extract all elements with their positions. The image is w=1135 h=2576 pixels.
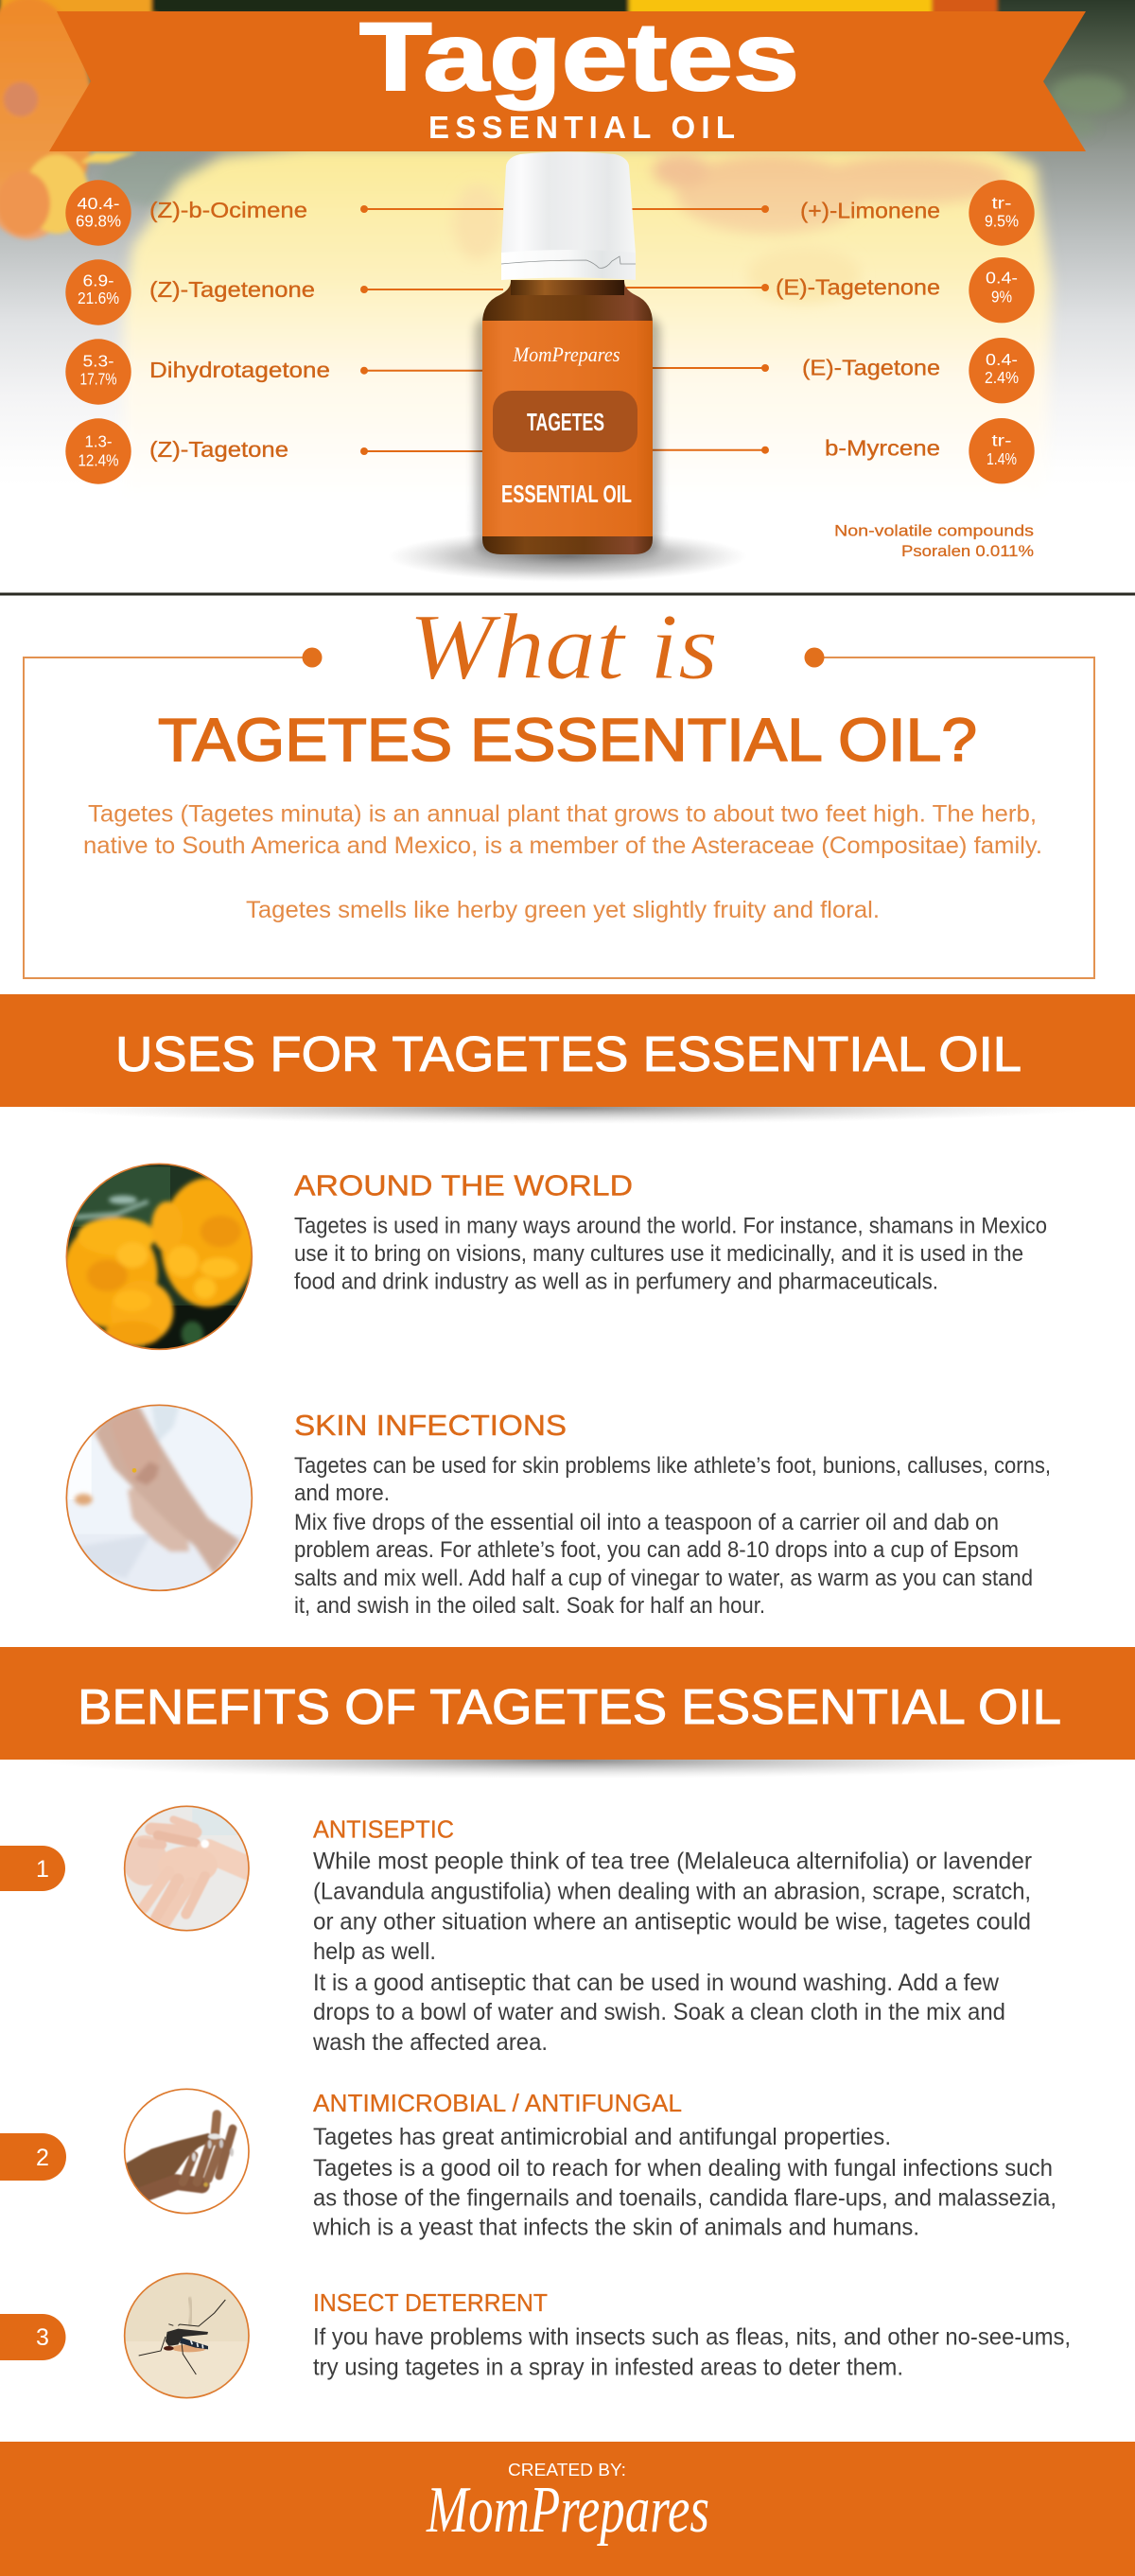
compound: Z-Tagetone: 1.3- bbox=[85, 432, 113, 451]
number badge 1 bbox=[0, 1846, 65, 1891]
section band: uses: USES FOR TAGETES ESSENTIAL OIL bbox=[115, 1027, 1022, 1082]
compound: E-Tagetone: 2.4% bbox=[985, 368, 1019, 387]
title ribbon banner bbox=[49, 3, 1086, 151]
description paragraph: Tagetes smells like herby green yet slightly fruity and floral. bbox=[246, 897, 880, 923]
compound: Z-Tagetone: (Z)-Tagetone bbox=[149, 437, 288, 462]
body text bbox=[312, 2124, 1056, 2240]
body text: While most people think of tea tree (Melaleuca alternifolia) or lavender bbox=[313, 1849, 1032, 1875]
compound: Limonene: 9.5% bbox=[985, 212, 1019, 231]
body text: (Lavandula angustifolia) when dealing with an abrasion, scrape, scratch, bbox=[313, 1879, 1031, 1905]
use: around the world bbox=[57, 1154, 1047, 1359]
description paragraph bbox=[83, 801, 1042, 923]
compound: E-Tagetenone: (E)-Tagetenone bbox=[776, 275, 940, 300]
footer bbox=[0, 2442, 1135, 2576]
compound: Dihydrotagetone: Dihydrotagetone bbox=[149, 358, 330, 382]
body text: Tagetes has great antimicrobial and antifungal properties. bbox=[313, 2124, 891, 2150]
compound: E-Tagetone: (E)-Tagetone bbox=[802, 356, 940, 380]
body text: use it to bring on visions, many cultures use it medicinally, and it is used in the bbox=[294, 1241, 1023, 1267]
body text bbox=[294, 1214, 1047, 1294]
body text: help as well. bbox=[313, 1938, 436, 1965]
body text: try using tagetes in a spray in infested areas to deter them. bbox=[313, 2354, 903, 2380]
body text bbox=[294, 1453, 1051, 1619]
subtitle: Essential Oil: ESSENTIAL OIL bbox=[428, 110, 735, 145]
bottle cap bbox=[501, 151, 636, 280]
heading: antimicrobial: ANTIMICROBIAL / ANTIFUNGAL bbox=[313, 2089, 682, 2117]
compound: Z-Tagetenone: 21.6% bbox=[78, 289, 119, 307]
body text: It is a good antiseptic that can be used in wound washing. Add a few bbox=[313, 1970, 1000, 1996]
number badge 3: 3 bbox=[36, 2324, 49, 2351]
compound: Z-Tagetenone: (Z)-Tagetenone bbox=[149, 277, 315, 302]
body text: Tagetes is a good oil to reach for when dealing with fungal infections such bbox=[313, 2155, 1053, 2182]
bottle label brand: MomPrepares bbox=[513, 342, 620, 366]
non-volatile compounds note: Psoralen 0.011% bbox=[901, 542, 1034, 560]
icon: essential oil bottle bbox=[388, 151, 747, 582]
body text: If you have problems with insects such as fleas, nits, and other no-see-ums, bbox=[313, 2324, 1071, 2351]
brand: MomPrepares: MomPrepares bbox=[426, 2474, 709, 2547]
description paragraph: Tagetes (Tagetes minuta) is an annual plant that grows to about two feet high. The herb, bbox=[88, 801, 1037, 828]
section band: benefits: BENEFITS OF TAGETES ESSENTIAL OIL bbox=[78, 1680, 1061, 1735]
panel: what is bbox=[24, 594, 1094, 978]
body text: food and drink industry as well as in perfumery and pharmaceuticals. bbox=[294, 1270, 938, 1294]
photo: dark hands bbox=[123, 2089, 250, 2214]
body text: Tagetes is used in many ways around the world. For instance, shamans in Mexico bbox=[294, 1214, 1047, 1239]
non-volatile compounds note: Non-volatile compounds bbox=[834, 522, 1034, 539]
body text: it, and swish in the oiled salt. Soak for half an hour. bbox=[294, 1593, 765, 1619]
compound: E-Tagetone bbox=[802, 338, 1035, 403]
compound: E-Tagetenone: 9% bbox=[991, 288, 1012, 307]
right flower bbox=[161, 1178, 255, 1307]
compound: b-Myrcene: b-Myrcene bbox=[825, 436, 940, 461]
heading: insect deterrent: INSECT DETERRENT bbox=[313, 2288, 548, 2317]
photo: mosquito on skin bbox=[123, 2272, 250, 2399]
body text: wash the affected area. bbox=[312, 2029, 548, 2056]
bottle label plate: TAGETES bbox=[527, 408, 604, 436]
section band: uses bbox=[0, 994, 1135, 1124]
title: Tagetes: Tagetes bbox=[359, 3, 799, 111]
number badge 1: 1 bbox=[36, 1856, 49, 1883]
header photo background bbox=[0, 0, 1135, 458]
body text: problem areas. For athlete’s foot, you can add 8-10 drops into a cup of Epsom bbox=[294, 1537, 1019, 1563]
compound: Z-Tagetenone bbox=[65, 259, 315, 325]
use: skin infections bbox=[57, 1395, 1051, 1619]
benefit 3: insect deterrent bbox=[0, 2272, 1069, 2399]
compound: E-Tagetenone: 0.4- bbox=[986, 269, 1018, 288]
created by: CREATED BY: bbox=[508, 2461, 626, 2480]
heading: around the world: AROUND THE WORLD bbox=[294, 1169, 633, 1202]
compound: Limonene: (+)-Limonene bbox=[800, 199, 940, 223]
photo: hand with cream bbox=[123, 1805, 250, 1932]
compound: Z-Tagetenone: 6.9- bbox=[83, 272, 114, 290]
compound: b-Myrcene bbox=[825, 418, 1035, 483]
number badge 2: 2 bbox=[36, 2145, 49, 2171]
body text: Mix five drops of the essential oil into a teaspoon of a carrier oil and dab on bbox=[294, 1510, 999, 1535]
body text: as those of the fingernails and toenails, candida flare-ups, and malassezia, bbox=[313, 2185, 1056, 2212]
benefit 1: antiseptic bbox=[0, 1797, 1032, 2056]
body text: which is a yeast that infects the skin of animals and humans. bbox=[312, 2214, 919, 2240]
compound: b-Myrcene: 1.4% bbox=[987, 449, 1017, 468]
body text: salts and mix well. Add half a cup of vinegar to water, as warm as you can stand bbox=[294, 1566, 1033, 1591]
compound: Dihydrotagetone: 17.7% bbox=[79, 370, 117, 389]
number badge 2 bbox=[0, 2133, 66, 2181]
compound: Z-Tagetone bbox=[65, 418, 288, 484]
body text bbox=[312, 1849, 1032, 2056]
photo: marigolds bbox=[66, 1164, 253, 1351]
compound: Z-b-Ocimene: 69.8% bbox=[76, 212, 121, 231]
compound: Z-b-Ocimene bbox=[65, 180, 307, 246]
compound leader lines bbox=[360, 205, 769, 455]
heading: Tagetes essential oil?: TAGETES ESSENTIAL OIL? bbox=[158, 706, 977, 774]
body text: drops to a bowl of water and swish. Soak a clean cloth in the mix and bbox=[313, 1999, 1005, 2025]
compound: E-Tagetone: 0.4- bbox=[986, 350, 1018, 369]
heading: antiseptic: ANTISEPTIC bbox=[313, 1814, 454, 1843]
compounds left column bbox=[65, 180, 330, 484]
compounds right column bbox=[776, 180, 1035, 483]
body text: Tagetes can be used for skin problems like athlete’s foot, bunions, calluses, corns, bbox=[294, 1453, 1051, 1479]
compound: Limonene bbox=[800, 180, 1035, 246]
left flower bbox=[67, 1234, 161, 1331]
compound: E-Tagetenone bbox=[776, 257, 1035, 323]
compound: Z-b-Ocimene: 40.4- bbox=[78, 194, 120, 213]
compound: Dihydrotagetone bbox=[65, 339, 330, 405]
compound: Z-b-Ocimene: (Z)-b-Ocimene bbox=[149, 198, 307, 222]
photo: legs and foot bbox=[66, 1404, 253, 1591]
bottom edge strip of header bbox=[0, 592, 1135, 596]
body text bbox=[313, 2324, 1071, 2380]
script heading: What is: What is bbox=[409, 594, 718, 699]
compound: Dihydrotagetone: 5.3- bbox=[83, 352, 114, 371]
bottle label plate bbox=[493, 391, 637, 452]
body text: or any other situation where an antiseptic would be wise, tagetes could bbox=[313, 1908, 1031, 1935]
compound: Limonene: tr- bbox=[991, 193, 1012, 212]
benefit 2: antimicrobial bbox=[0, 2081, 1056, 2240]
non-volatile compounds note bbox=[834, 522, 1034, 560]
number badge 3 bbox=[0, 2314, 66, 2360]
compound: b-Myrcene: tr- bbox=[991, 431, 1012, 450]
compound: Z-Tagetone: 12.4% bbox=[78, 451, 119, 470]
section band: benefits bbox=[0, 1647, 1135, 1779]
bottle label text: ESSENTIAL OIL bbox=[501, 480, 632, 508]
description paragraph: native to South America and Mexico, is a member of the Asteraceae (Compositae) family. bbox=[83, 832, 1042, 859]
body text: and more. bbox=[294, 1481, 390, 1506]
heading: skin infections: SKIN INFECTIONS bbox=[294, 1409, 567, 1442]
